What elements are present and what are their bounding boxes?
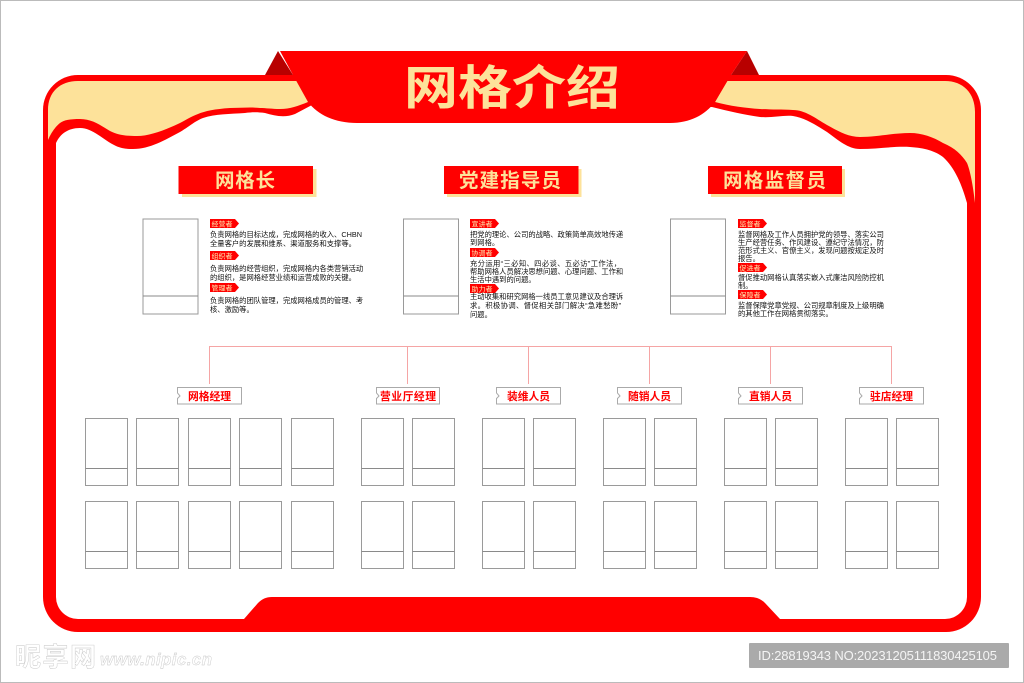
description text: 范形式主义、官僚主义，发现问题按规定及时	[738, 246, 885, 255]
description text: 督促推动网格认真落实嵌入式廉洁风险防控机	[738, 273, 885, 282]
role tag: 保障者	[738, 290, 767, 300]
panel: cream flag right	[715, 81, 975, 203]
description text	[470, 230, 624, 247]
description text: 到网格。	[470, 238, 499, 247]
label: 营业厅经理	[376, 388, 440, 404]
heading: 党建指导员	[444, 166, 582, 197]
photo grid	[86, 418, 334, 568]
watermark: 昵享网	[15, 642, 96, 672]
description text: 负责网格的经营组织，完成网格内各类营销活动	[210, 264, 363, 273]
description text	[738, 301, 884, 318]
description text	[210, 230, 362, 248]
description text	[470, 259, 623, 284]
photo grid	[362, 418, 454, 568]
role tag: 宣讲者: 宣讲者	[472, 220, 492, 228]
description text: 把党的理论、公司的战略、政策简单高效地传递	[470, 230, 624, 239]
group: 随销人员	[604, 388, 696, 568]
group: 装维人员	[482, 388, 576, 568]
role tag: 组织者: 组织者	[212, 252, 232, 260]
photo grid	[604, 418, 696, 568]
description text: 主动收集和研究网格一线员工意见建议及合理诉	[470, 292, 623, 301]
description text: 报告。	[738, 254, 760, 263]
description text	[738, 273, 885, 290]
org tree connectors	[210, 346, 892, 384]
description text: 监督网格及工作人员拥护党的领导、落实公司	[738, 230, 884, 239]
role tag: 保障者: 保障者	[740, 290, 760, 300]
photo placeholder	[670, 219, 726, 314]
label: 直销人员	[738, 388, 802, 404]
photo placeholder	[404, 219, 458, 314]
photo grid	[724, 418, 818, 568]
description text: 求。积极协调、督促相关部门解决“急难愁盼”	[470, 301, 622, 310]
role tag: 经营者	[210, 219, 239, 228]
role tag: 监督者	[738, 219, 767, 228]
description text: 生产经营任务、作风建设、遵纪守法情况，防	[738, 238, 884, 247]
description text: 充分运用“三必知、四必谈、五必访”工作法，	[470, 259, 621, 268]
heading: 网格监督员: 网格监督员	[723, 170, 826, 192]
label: 网格经理: 网格经理	[188, 389, 231, 403]
group: 网格经理	[86, 388, 334, 568]
description text: 负责网格的目标达成，完成网格的收入、CHBN	[210, 230, 362, 239]
group: 驻店经理	[846, 388, 938, 568]
label: 随销人员	[618, 388, 682, 404]
description text: 帮助网格人员解决思想问题、心理问题、工作和	[470, 267, 623, 276]
role tag: 宣讲者	[470, 219, 499, 228]
image id stamp	[749, 643, 1009, 668]
bottom tab	[244, 597, 780, 619]
role tag: 助力者	[470, 284, 499, 294]
role tag: 协调者	[470, 248, 499, 258]
image id stamp: ID:28819343 NO:20231205111830425105	[758, 648, 997, 663]
role tag: 管理者: 管理者	[212, 284, 232, 292]
role tag: 协调者: 协调者	[472, 248, 492, 258]
panel: 党建指导员	[404, 166, 624, 319]
label: 驻店经理: 驻店经理	[870, 389, 913, 403]
role tag: 组织者	[210, 251, 239, 260]
role tag: 促进者: 促进者	[740, 264, 760, 272]
label: 直销人员: 直销人员	[749, 389, 792, 403]
role tag: 管理者	[210, 283, 239, 292]
label: 驻店经理	[860, 388, 924, 404]
panel: 网格监督员	[670, 166, 885, 318]
group: 直销人员	[724, 388, 818, 568]
label: 营业厅经理: 营业厅经理	[380, 389, 436, 403]
photo grid	[482, 418, 576, 568]
heading: 党建指导员: 党建指导员	[459, 170, 561, 192]
heading: 网格长	[178, 166, 316, 197]
heading: 网格长: 网格长	[215, 170, 275, 192]
watermark	[15, 642, 212, 672]
role tag: 监督者: 监督者	[740, 220, 760, 228]
description text: 负责网格的团队管理，完成网格成员的管理、考	[210, 296, 363, 305]
description text: 监督保障党章党规、公司规章制度及上级明确	[738, 301, 884, 310]
photo grid	[846, 418, 938, 568]
label: 装维人员: 装维人员	[507, 389, 550, 403]
heading: 网格监督员	[708, 166, 845, 197]
panel: 网格长	[143, 166, 363, 314]
panel: cream flag left	[48, 81, 312, 140]
description text: 生活中遇到的问题。	[470, 275, 536, 284]
title: 网格介绍	[404, 62, 620, 114]
description text	[210, 296, 363, 314]
role tag: 经营者: 经营者	[212, 220, 232, 228]
photo placeholder	[143, 219, 198, 314]
description text: 核、激励等。	[210, 305, 254, 314]
description text	[738, 230, 885, 263]
description text: 全量客户的发展和维系、渠道服务和支撑等。	[210, 239, 356, 248]
description text: 制。	[738, 281, 753, 290]
label: 装维人员	[496, 388, 560, 404]
watermark: www.nipic.cn	[100, 650, 212, 669]
role tag: 促进者	[738, 263, 767, 272]
label: 网格经理	[178, 388, 242, 404]
description text	[210, 264, 363, 282]
description text: 的组织，是网格经营业绩和运营成败的关键。	[210, 273, 356, 282]
description text: 的其他工作在网格贯彻落实。	[738, 309, 833, 318]
panel: top title banner	[265, 51, 759, 123]
role tag: 助力者: 助力者	[472, 284, 492, 294]
description text: 问题。	[470, 310, 492, 319]
panel: red frame	[43, 75, 981, 632]
label: 随销人员: 随销人员	[628, 389, 671, 403]
description text	[470, 292, 623, 319]
group: 营业厅经理	[362, 388, 454, 568]
